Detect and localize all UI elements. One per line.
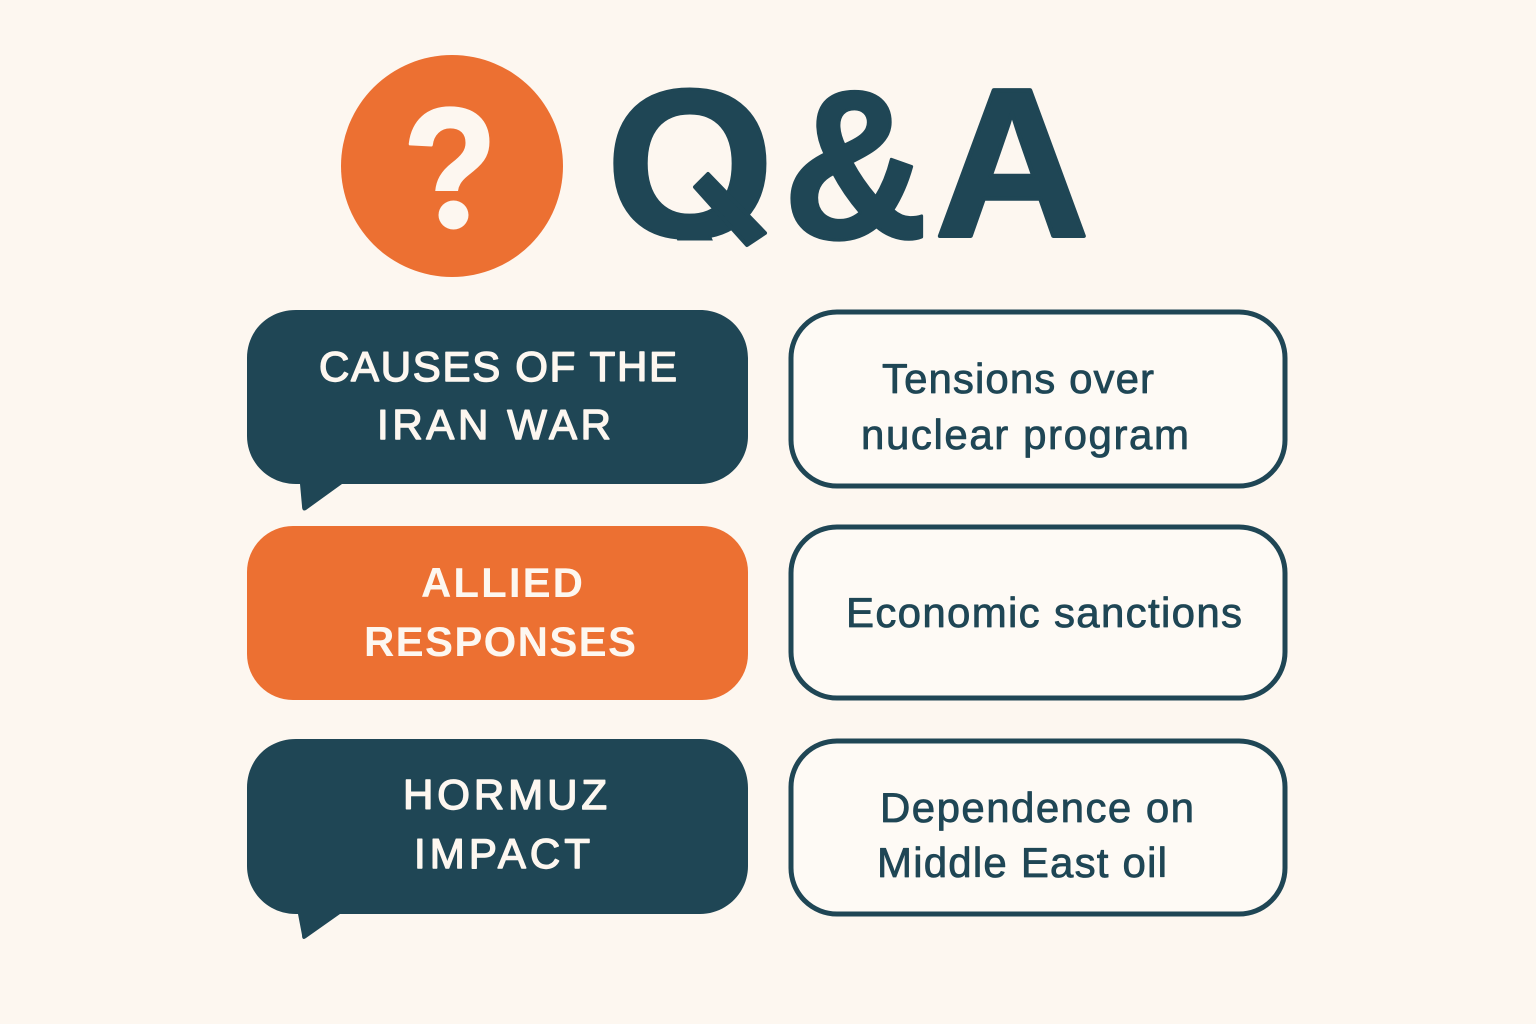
panel: causes answer bbox=[791, 312, 1285, 486]
title: & bbox=[783, 46, 928, 283]
panel: hormuz answer bbox=[791, 741, 1285, 914]
panel: hormuz question bubble: IMPACT bbox=[414, 830, 590, 877]
title: A bbox=[934, 44, 1090, 281]
panel: causes answer: nuclear program bbox=[861, 411, 1189, 458]
panel: allied responses question bbox=[247, 526, 748, 700]
panel: hormuz question bubble bbox=[247, 739, 748, 939]
panel: causes answer: Tensions over bbox=[882, 355, 1154, 402]
panel: hormuz answer: Middle East oil bbox=[877, 839, 1167, 886]
panel: causes question bubble: IRAN WAR bbox=[377, 401, 611, 448]
panel: causes question bubble: CAUSES OF THE bbox=[319, 343, 677, 390]
icon: question mark circle bbox=[341, 55, 563, 277]
panel: allied responses question: ALLIED bbox=[421, 559, 583, 606]
panel: hormuz answer: Dependence on bbox=[880, 784, 1194, 831]
title: Q bbox=[606, 45, 774, 282]
title bbox=[613, 88, 1086, 248]
panel: causes question bubble bbox=[247, 310, 748, 510]
panel: allied responses answer bbox=[791, 527, 1285, 698]
panel: allied responses answer: Economic sanctions bbox=[846, 589, 1242, 636]
icon: question mark circle: ? bbox=[403, 73, 497, 265]
panel: hormuz question bubble: HORMUZ bbox=[403, 771, 607, 818]
panel: allied responses question: RESPONSES bbox=[364, 618, 636, 665]
